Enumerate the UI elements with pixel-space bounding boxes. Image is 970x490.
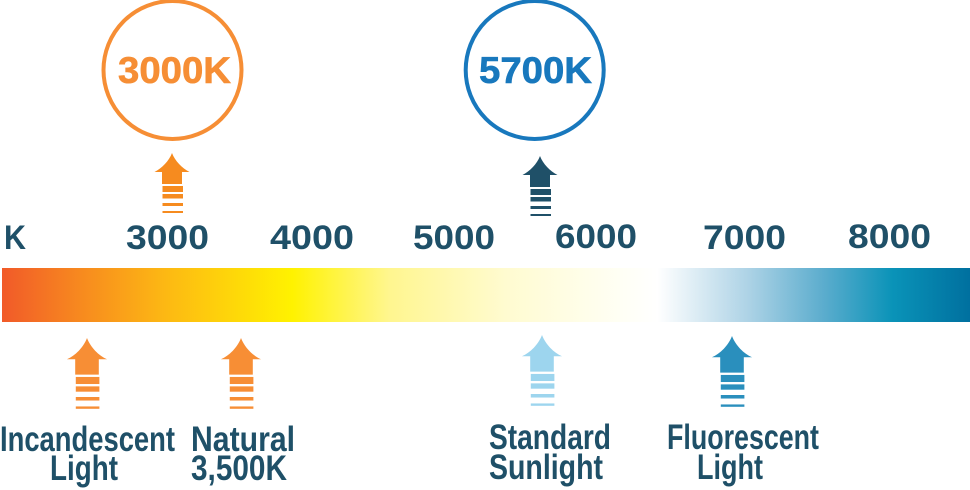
badge: 5700K: 5700K [479, 50, 592, 91]
badge: 3000K [104, 1, 242, 139]
badge: 5700K [466, 1, 604, 139]
label: fluorescent light: Fluorescent [667, 418, 819, 457]
label: standard sunlight: Standard [489, 418, 611, 457]
label: natural 3,500K: Natural [191, 420, 295, 459]
scale labels: kelvin values: 8000 [848, 218, 931, 256]
label: standard sunlight [489, 418, 611, 487]
label: standard sunlight: Sunlight [489, 448, 603, 487]
scale labels: kelvin values: 5000 [413, 219, 495, 257]
badge: 3000K: 3000K [118, 50, 231, 91]
scale labels: kelvin values: 7000 [703, 219, 786, 257]
arrow: to 5700K badge [522, 156, 558, 216]
arrow: fluorescent [712, 336, 752, 407]
arrow: incandescent [67, 338, 107, 409]
label: incandescent light: Light [50, 449, 118, 488]
scale labels: kelvin values: 6000 [555, 218, 637, 256]
arrow: to 3000K badge [154, 153, 190, 213]
scale labels: kelvin values: 4000 [270, 219, 354, 257]
label: incandescent light [0, 420, 175, 488]
label: fluorescent light [667, 418, 819, 487]
scale labels: kelvin values: 3000 [126, 219, 209, 257]
arrow: natural [221, 338, 261, 409]
arrow: standard sunlight [522, 335, 562, 406]
label: natural 3,500K [191, 420, 295, 488]
scale labels: kelvin values [126, 218, 931, 257]
label: natural 3,500K: 3,500K [191, 449, 287, 488]
label: fluorescent light: Light [697, 448, 763, 487]
label: incandescent light: Incandescent [0, 420, 175, 459]
colour temperature gradient bar [2, 268, 970, 322]
scale unit label: K [4, 219, 26, 257]
